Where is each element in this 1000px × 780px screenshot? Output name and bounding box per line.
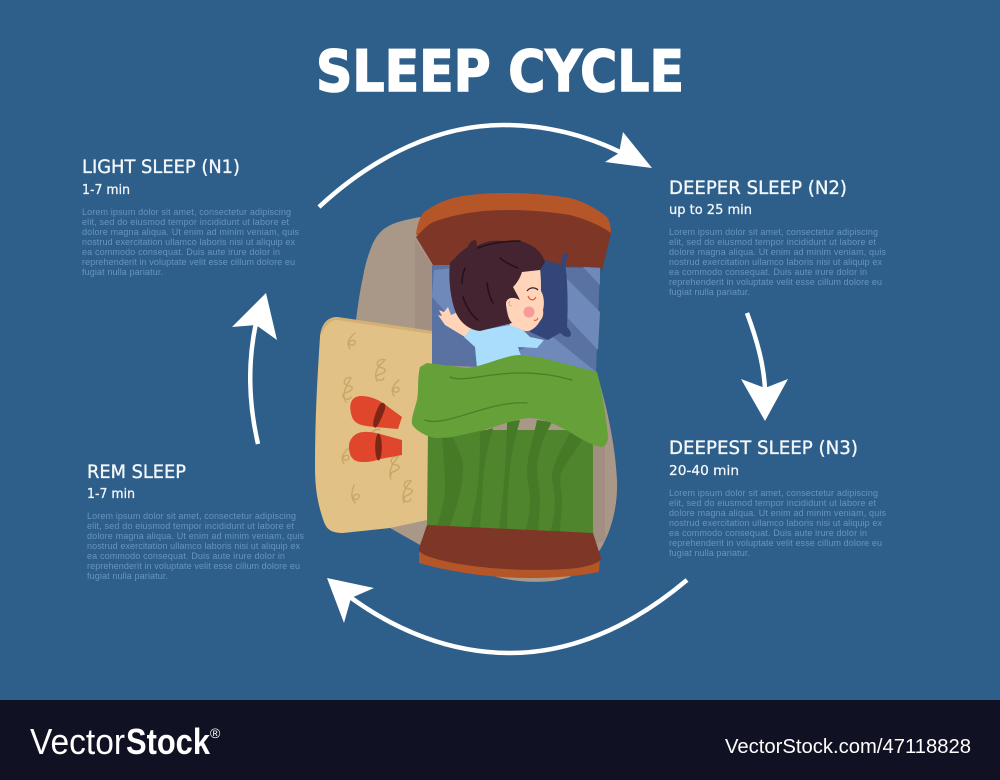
arrow: light to deeper [319, 125, 652, 207]
ear [506, 298, 518, 310]
panel: deepest sleep N3: fugiat nulla pariatur. [669, 548, 750, 558]
panel: deepest sleep N3: DEEPEST SLEEP (N3) [669, 437, 858, 459]
watermark id: VectorStock.com/47118828 [725, 736, 971, 758]
panel: light sleep N1: Lorem ipsum dolor sit amet, consectetur adipiscing [82, 207, 291, 217]
title: SLEEP CYCLE [316, 39, 684, 105]
panel: REM sleep [87, 461, 304, 581]
panel: deepest sleep N3: 20-40 min [669, 464, 739, 479]
rug swirls [342, 333, 412, 503]
panel: REM sleep: ea commodo consequat. Duis aute irure dolor in [87, 551, 285, 561]
face [505, 268, 544, 331]
hand [438, 307, 472, 337]
panel: deepest sleep N3: Lorem ipsum dolor sit amet, consectetur adipiscing [669, 488, 878, 498]
panel: deepest sleep N3: reprehenderit in voluptate velit esse cillum dolore eu [669, 538, 882, 548]
pillow [530, 253, 571, 340]
panel: light sleep N1: fugiat nulla pariatur. [82, 267, 163, 277]
hair [449, 240, 545, 331]
panel: deepest sleep N3 [669, 437, 886, 558]
panel: REM sleep: 1-7 min [87, 487, 135, 502]
panel: REM sleep: Lorem ipsum dolor sit amet, consectetur adipiscing [87, 511, 296, 521]
panel: REM sleep: REM SLEEP [87, 461, 186, 483]
panel: REM sleep: elit, sed do eiusmod tempor incididunt ut labore et [87, 521, 294, 531]
panel: deeper sleep N2: up to 25 min [669, 203, 752, 218]
panel: light sleep N1: 1-7 min [82, 183, 130, 198]
panel: deeper sleep N2: fugiat nulla pariatur. [669, 287, 750, 297]
panel: deeper sleep N2: ea commodo consequat. Duis aute irure dolor in [669, 267, 867, 277]
blanket fold [412, 355, 608, 447]
watermark logo: Vector [30, 721, 125, 762]
panel: REM sleep: dolore magna aliqua. Ut enim ad minim veniam, quis [87, 531, 304, 541]
panel: deeper sleep N2: Lorem ipsum dolor sit amet, consectetur adipiscing [669, 227, 878, 237]
panel: deepest sleep N3: ea commodo consequat. Duis aute irure dolor in [669, 528, 867, 538]
arrow: deepest to REM [327, 578, 687, 653]
rug [315, 317, 432, 533]
panel: deeper sleep N2: nostrud exercitation ullamco laboris nisi ut aliquip ex [669, 257, 882, 267]
grey floor blob [345, 217, 617, 582]
headboard [416, 193, 611, 271]
panel: light sleep N1: nostrud exercitation ullamco laboris nisi ut aliquip ex [82, 237, 296, 247]
panel: deepest sleep N3: dolore magna aliqua. Ut enim ad minim veniam, quis [669, 508, 886, 518]
mattress with striped sheet [432, 265, 600, 372]
panel: light sleep N1: elit, sed do eiusmod tempor incididunt ut labore et [82, 217, 289, 227]
panel: deeper sleep N2: elit, sed do eiusmod tempor incididunt ut labore et [669, 237, 876, 247]
watermark footer bar [0, 700, 1000, 780]
arrow: REM to light [232, 293, 277, 444]
blanket body [427, 420, 593, 535]
illustration: child sleeping in bed [315, 193, 617, 582]
watermark logo: Stock [126, 721, 211, 762]
panel: light sleep N1: dolore magna aliqua. Ut enim ad minim veniam, quis [82, 227, 300, 237]
panel: deeper sleep N2: DEEPER SLEEP (N2) [669, 177, 847, 199]
arrow: deeper to deepest [741, 313, 788, 421]
panel: light sleep N1: ea commodo consequat. Duis aute irure dolor in [82, 247, 280, 257]
slippers [349, 396, 402, 462]
panel: light sleep N1: LIGHT SLEEP (N1) [82, 156, 240, 178]
panel: light sleep N1 [82, 156, 300, 277]
watermark logo: ® [210, 725, 221, 741]
panel: deeper sleep N2: dolore magna aliqua. Ut enim ad minim veniam, quis [669, 247, 886, 257]
panel: deepest sleep N3: nostrud exercitation ullamco laboris nisi ut aliquip ex [669, 518, 882, 528]
panel: deeper sleep N2 [669, 177, 886, 297]
panel: deepest sleep N3: elit, sed do eiusmod tempor incididunt ut labore et [669, 498, 876, 508]
panel: deeper sleep N2: reprehenderit in voluptate velit esse cillum dolore eu [669, 277, 882, 287]
panel: REM sleep: nostrud exercitation ullamco laboris nisi ut aliquip ex [87, 541, 300, 551]
panel: REM sleep: reprehenderit in voluptate velit esse cillum dolore eu [87, 561, 300, 571]
panel: REM sleep: fugiat nulla pariatur. [87, 571, 168, 581]
panel: light sleep N1: reprehenderit in voluptate velit esse cillum dolore eu [82, 257, 295, 267]
footboard [419, 525, 601, 578]
watermark logo [30, 721, 221, 762]
pajama top [464, 325, 544, 368]
